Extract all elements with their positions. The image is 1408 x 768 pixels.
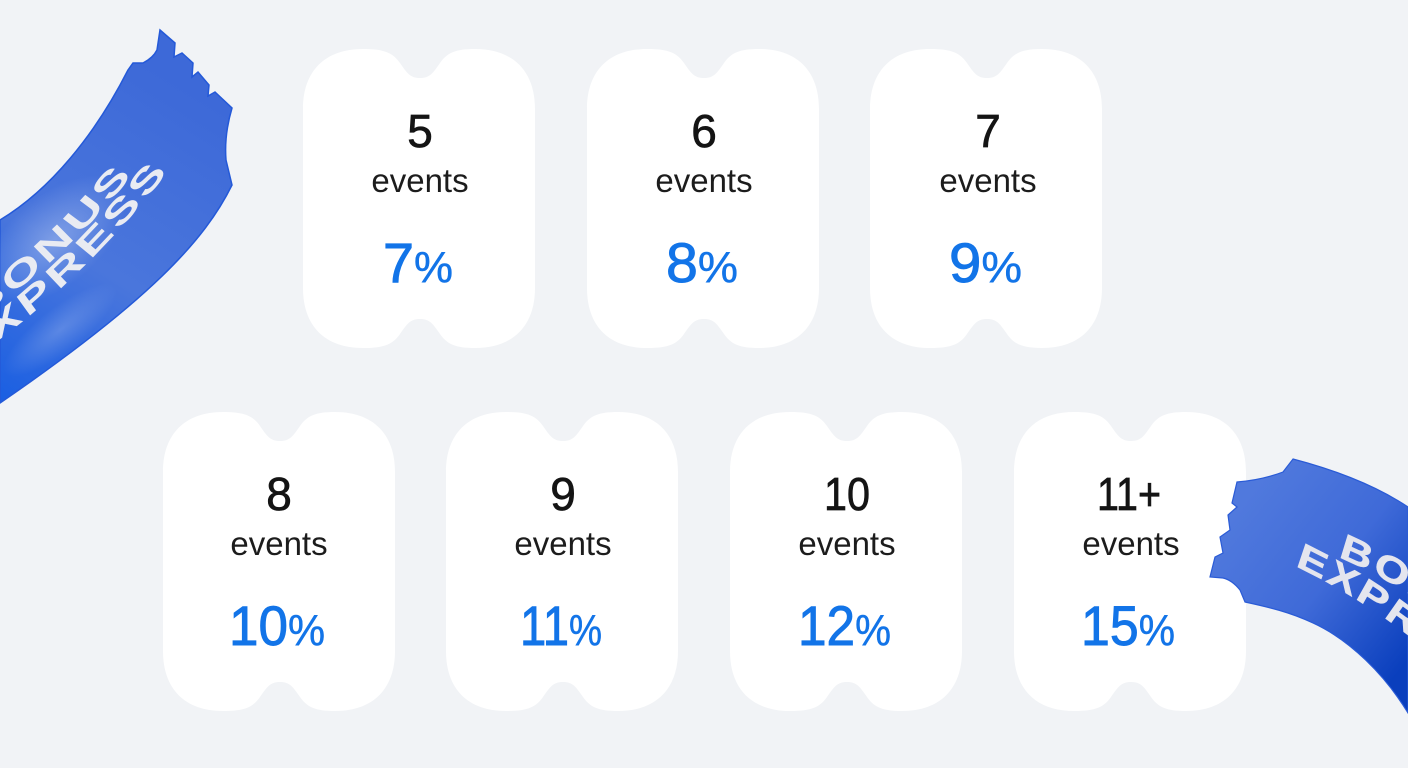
ribbon: top-left bonus express ticket [0,28,233,404]
card: 8 events 10%: 10% [229,594,325,657]
card: 9 events 11%: 11% [520,594,602,657]
card: 9 events 11%: 9 [550,468,576,520]
card: 6 events 8%: 6 [691,105,717,157]
card: 11+ events 15% [1014,412,1246,711]
card: 6 events 8%: events [655,162,753,199]
card: 5 events 7%: 5 [407,105,433,157]
card: 11+ events 15%: events [1082,525,1180,562]
card: 10 events 12%: 10 [824,468,870,520]
card: 5 events 7%: 7% [383,231,453,294]
card: 5 events 7%: events [371,162,469,199]
card: 9 events 11%: events [514,525,612,562]
card: 7 events 9%: 7 [975,105,1001,157]
card: 8 events 10% [163,412,395,711]
card: 8 events 10%: events [230,525,328,562]
card: 7 events 9%: events [939,162,1037,199]
card: 7 events 9% [870,49,1102,348]
card: 11+ events 15%: 11+ [1097,468,1161,520]
card: 5 events 7% [303,49,535,348]
card: 7 events 9%: 9% [949,231,1022,294]
card: 10 events 12%: 12% [798,594,891,657]
ribbon: bottom-right bonus express ticket [1209,458,1408,714]
card: 9 events 11% [446,412,678,711]
card: 11+ events 15%: 15% [1081,594,1175,657]
card: 10 events 12% [730,412,962,711]
card: 8 events 10%: 8 [266,468,292,520]
card: 6 events 8% [587,49,819,348]
card: 6 events 8%: 8% [666,231,738,294]
card: 10 events 12%: events [798,525,896,562]
